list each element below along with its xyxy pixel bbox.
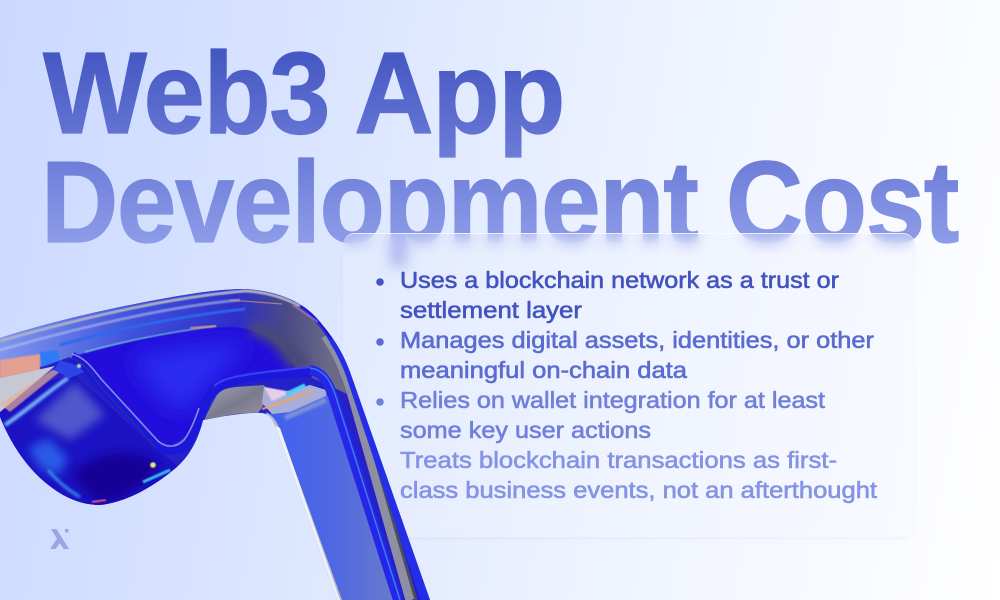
iridescent streak <box>85 326 216 352</box>
top rim highlights <box>0 291 300 341</box>
lower blob <box>0 376 178 505</box>
bullet 4: class business events, not an afterthought <box>400 477 878 503</box>
bullet 1: Uses a blockchain network as a trust or <box>400 267 839 293</box>
glass 3D shape <box>0 289 430 600</box>
bullet 1: settlement layer <box>400 297 582 323</box>
right outer rails <box>310 370 398 600</box>
bullet 2: meaningful on-chain data <box>400 357 687 383</box>
central deep blue fill <box>78 327 296 445</box>
bullet 3: some key user actions <box>400 417 651 443</box>
right leg panel <box>270 388 400 600</box>
bullet 3 <box>377 387 826 443</box>
title: Web3 App <box>43 28 564 158</box>
iridescent glints <box>262 385 326 414</box>
bullet 4 <box>400 447 878 503</box>
grey underside <box>204 385 266 420</box>
bullet 4: Treats blockchain transactions as first- <box>400 447 837 473</box>
bullet 1 <box>377 267 839 323</box>
bullet 2: Manages digital assets, identities, or other <box>400 327 874 353</box>
ridge <box>72 357 312 450</box>
upper glass band <box>0 280 360 450</box>
shape body <box>0 280 440 600</box>
leg white edge <box>266 412 342 600</box>
bullet 2 <box>377 327 874 383</box>
left side glass <box>0 354 40 378</box>
bullet 3: Relies on wallet integration for at least <box>400 387 826 413</box>
panel: frosted card <box>343 233 915 537</box>
